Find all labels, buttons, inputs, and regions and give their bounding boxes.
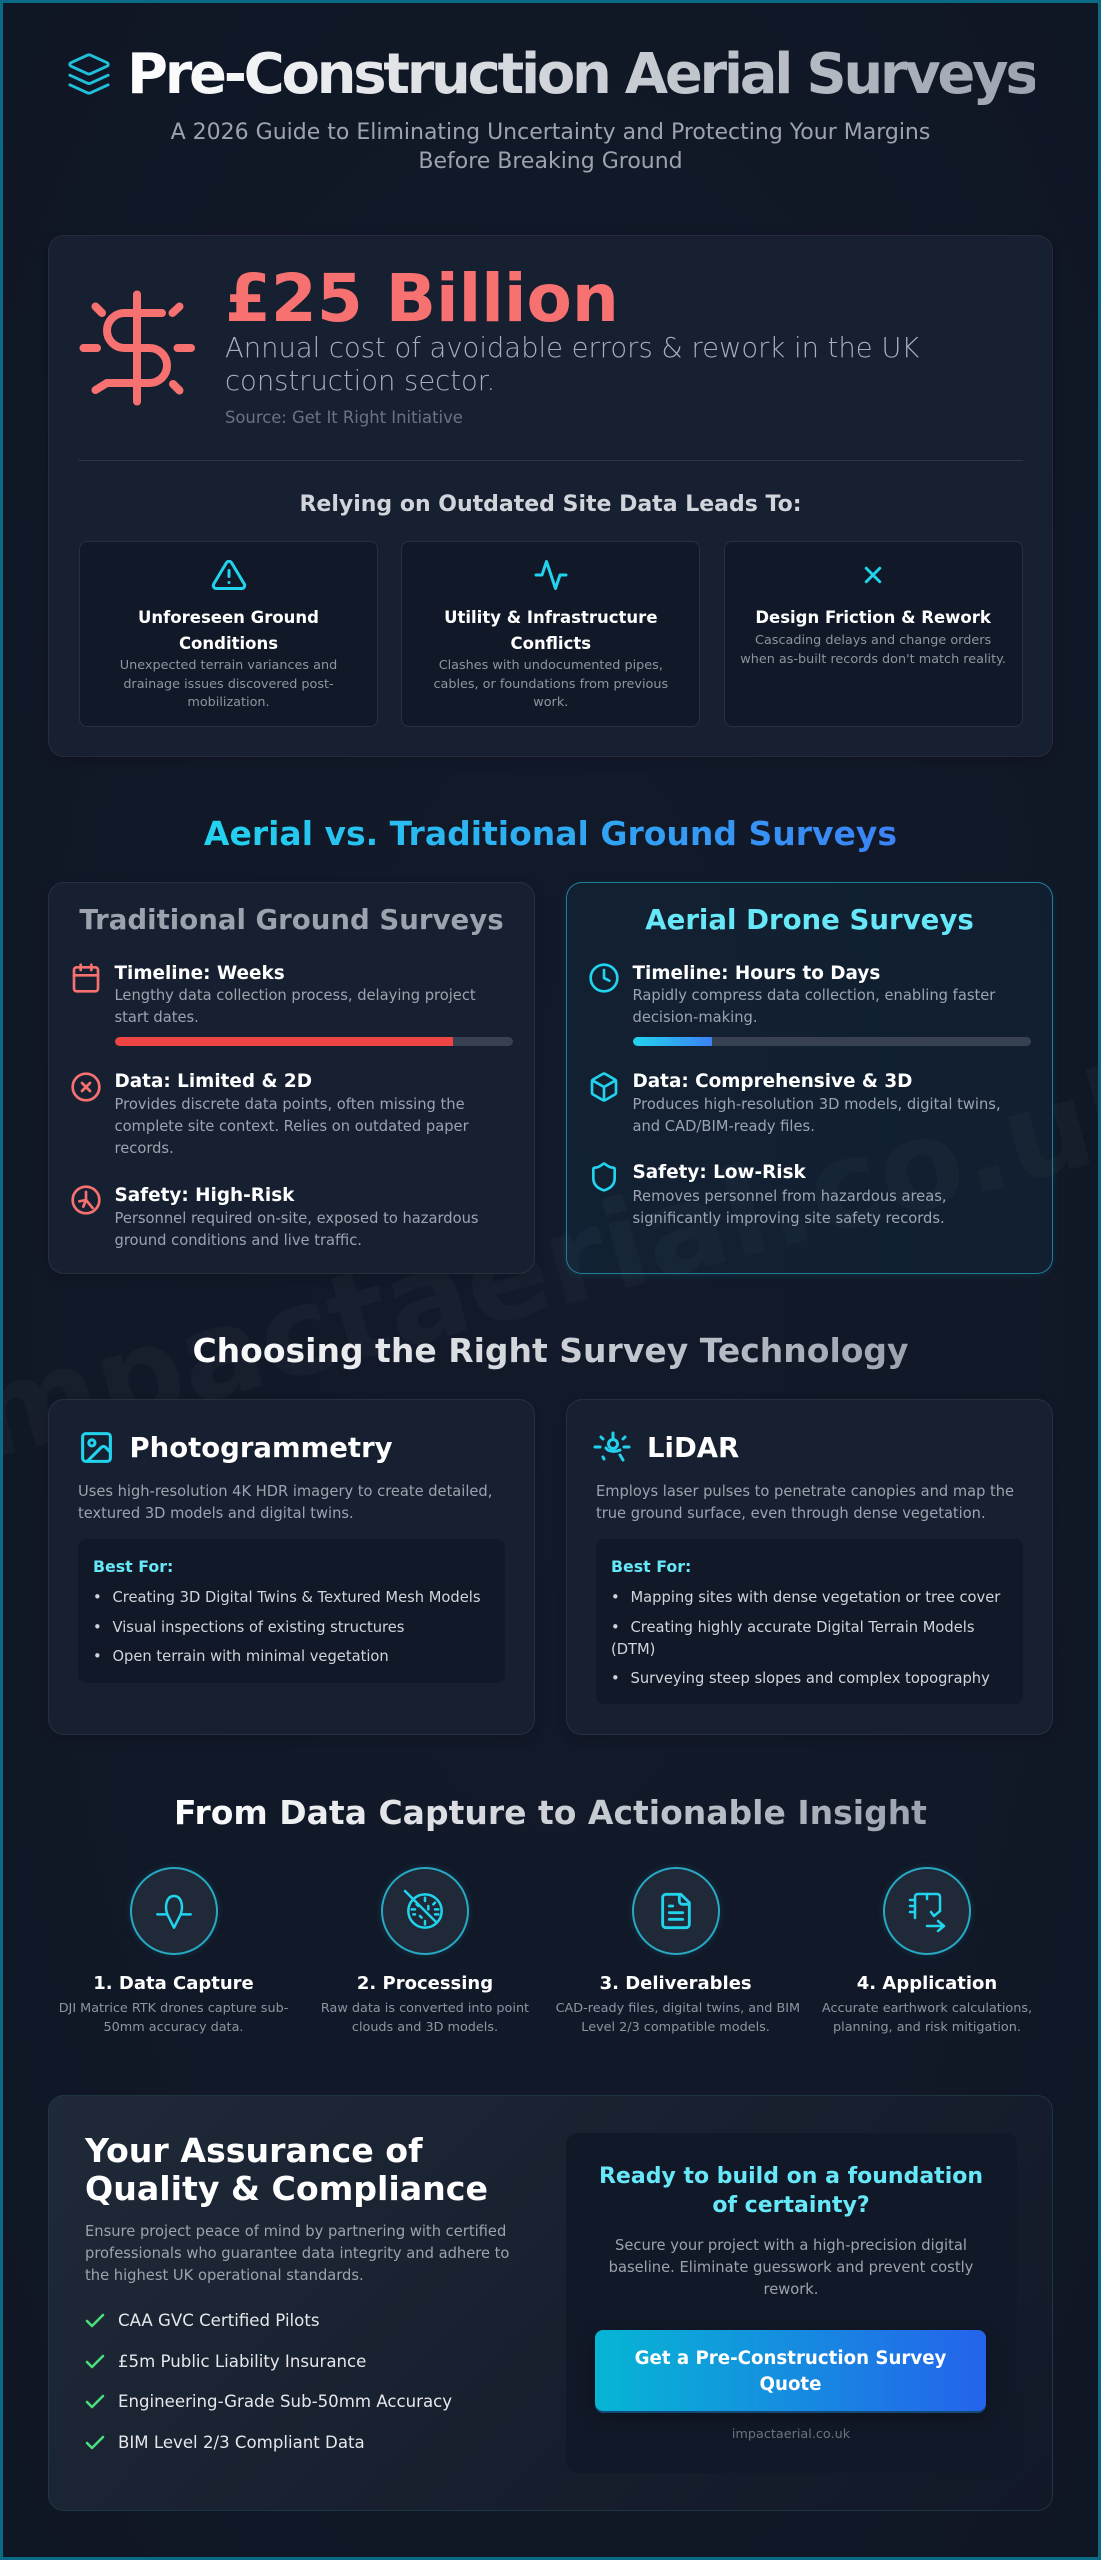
safety title: Safety: Low-Risk [632,1162,806,1182]
step title: 4. Application [857,1973,997,1994]
best for box: Open terrain with minimal vegetation [112,1648,389,1665]
icon circle: document [632,1867,720,1955]
icon: image [81,1432,112,1463]
card title: Conditions [179,634,278,652]
step text [556,2000,796,2037]
data text: Produces high-resolution 3D models, digital twins, [632,1096,1001,1112]
card text: when as-built records don't match reality. [740,652,1006,666]
step text [59,2001,288,2034]
use case 3: • [93,1648,102,1665]
safety title: Safety: High-Risk [114,1184,294,1206]
step text: Level 2/3 compatible models. [581,2020,770,2034]
assurance text: professionals who guarantee data integrity and adhere to [85,2245,509,2262]
cta button: Get a Pre-Construction Survey [635,2348,946,2368]
step: deliverables [556,1867,796,2047]
data text [632,1096,1001,1134]
best for heading: Best For: [611,1557,691,1576]
icon: dollar [80,290,195,406]
description: textured 3D models and digital twins. [78,1505,354,1522]
assurance heading [85,2132,488,2208]
use case 1 [611,1589,1000,1606]
icon: cube [590,1072,618,1102]
card title: Utility & Infrastructure [444,608,658,626]
check item 4 [81,2429,481,2457]
use case 2 [93,1618,404,1636]
step title: 3. Deliverables [600,1973,752,1994]
best for box: Creating highly accurate Digital Terrain Models [630,1618,975,1636]
icon: check [83,2431,107,2455]
panel title: Photogrammetry [130,1432,393,1464]
card text: Cascading delays and change orders [755,633,991,648]
label: CAA GVC Certified Pilots [118,2311,319,2330]
step text: planning, and risk mitigation. [833,2020,1021,2034]
heading: technology: Choosing the Right Survey Technology [192,1331,909,1370]
step text [305,2000,545,2037]
icon: shield [592,1162,616,1192]
data text: and CAD/BIM-ready files. [632,1118,815,1134]
card text [740,633,1006,666]
cta heading: Ready to build on a foundation [599,2164,983,2188]
icon: clock [589,963,619,993]
card: unforeseen ground conditions [79,541,378,727]
timeline text: start dates. [114,1009,199,1026]
subtitle [170,120,930,174]
data text: records. [114,1140,174,1156]
safety text: ground conditions and live traffic. [114,1232,362,1249]
card text: mobilization. [187,695,270,710]
card: utility conflicts [401,541,700,727]
panel title: Aerial Drone Surveys [645,903,974,936]
cta text: Secure your project with a high-precision digital [615,2237,967,2254]
cta text [566,2235,1016,2301]
subtitle: A 2026 Guide to Eliminating Uncertainty and Protecting Your Margins [171,120,930,144]
assurance text: the highest UK operational standards. [85,2267,364,2284]
timeline text [632,987,996,1026]
icon circle: pin [130,1867,218,1955]
panel: assurance [48,2095,1053,2511]
best for heading: Best For: [93,1557,173,1576]
bar: hours [632,1037,1031,1046]
timeline text [114,987,476,1026]
card title: Conflicts [510,634,591,652]
cta text: rework. [764,2281,818,2298]
check item 3 [81,2388,481,2416]
assurance text: Ensure project peace of mind by partnering with certified [85,2223,506,2240]
step: application [807,1867,1047,2047]
safety text [114,1210,479,1249]
card title: Unforeseen Ground [138,608,319,626]
panel: photogrammetry [48,1399,535,1735]
card text: Unexpected terrain variances and [120,658,337,673]
icon: check [83,2350,107,2374]
check item 1 [81,2307,481,2335]
use case 2: • [93,1618,102,1636]
use case 2: (DTM) [611,1640,655,1658]
card title: Design Friction & Rework [755,608,991,626]
panel title: LiDAR [647,1432,739,1464]
use case 2 [611,1618,975,1658]
icon: safety risk [71,1185,101,1215]
use case 1: • [611,1589,620,1606]
step: data capture [59,1866,288,2034]
source: Source: Get It Right Initiative [225,408,463,427]
panel: lidar [566,1399,1053,1735]
description: Uses high-resolution 4K HDR imagery to create detailed, [78,1483,492,1500]
timeline text: decision-making. [632,1009,758,1026]
best for box [78,1539,505,1683]
panel: traditional surveys [48,882,535,1274]
subtitle: Before Breaking Ground [418,149,683,174]
use case 1: • [93,1589,102,1606]
use case 3: • [611,1670,620,1687]
data text [114,1096,469,1156]
icon: calendar [72,963,100,993]
card text [433,658,668,710]
cost description: Annual cost of avoidable errors & rework in the UK [225,333,919,364]
cta heading: of certainty? [712,2192,870,2218]
card: design friction [724,541,1023,727]
heading: comparison: Aerial vs. Traditional Ground Surveys [204,814,897,853]
label: BIM Level 2/3 Compliant Data [118,2433,365,2452]
assurance text [85,2221,509,2287]
label: £5m Public Liability Insurance [118,2352,366,2371]
step text: DJI Matrice RTK drones capture sub- [59,2001,288,2016]
card text [120,658,337,710]
heading: process: From Data Capture to Actionable Insight [174,1792,927,1832]
cta heading [566,2162,1016,2220]
data title: Data: Comprehensive & 3D [632,1070,912,1092]
check item 2 [81,2348,481,2376]
website: impactaerial.co.uk [732,2427,850,2442]
icon: cross [864,566,882,584]
assurance heading: Quality & Compliance [85,2169,488,2208]
call to action box [566,2133,1016,2473]
description [78,1483,492,1522]
title: Pre-Construction Aerial Surveys [127,42,1035,107]
heading: outdated data: Relying on Outdated Site Data Leads To: [299,492,802,517]
card title [444,608,658,652]
timeline title: Timeline: Hours to Days [632,963,880,984]
use case 1 [93,1589,481,1606]
icon: check [83,2309,107,2333]
icon: activity [534,560,568,590]
use case 2: • [611,1618,620,1636]
card text: work. [533,695,568,710]
best for box: Visual inspections of existing structures [112,1618,404,1636]
label: Engineering-Grade Sub-50mm Accuracy [118,2392,452,2411]
safety text: Removes personnel from hazardous areas, [632,1188,947,1204]
data text: Provides discrete data points, often missing the [114,1096,465,1112]
cta button: Quote [760,2374,821,2394]
card title [138,608,319,652]
safety text [632,1188,947,1226]
best for box: Mapping sites with dense vegetation or tree cover [630,1589,1000,1606]
panel: cost of errors [48,235,1053,757]
step text [807,2000,1047,2037]
data text: complete site context. Relies on outdated paper [114,1118,469,1134]
best for box: Creating 3D Digital Twins & Textured Mesh Models [112,1589,481,1606]
timeline text: Rapidly compress data collection, enabling faster [632,987,995,1004]
big number: £25 Billion [225,260,619,337]
icon circle: processing [381,1867,469,1955]
data title: Data: Limited & 2D [114,1070,312,1092]
panel title: Traditional Ground Surveys [79,903,504,936]
cta button [595,2330,986,2411]
bar: weeks [114,1037,513,1046]
icon circle: notebook [883,1867,971,1955]
step text: clouds and 3D models. [352,2020,498,2034]
description [596,1483,1014,1522]
timeline title: Timeline: Weeks [114,963,285,984]
step text: Raw data is converted into point [321,2001,529,2016]
panel: aerial surveys [566,882,1053,1274]
step text: Accurate earthwork calculations, [822,2001,1032,2016]
best for box: Surveying steep slopes and complex topography [630,1670,990,1687]
icon: warning triangle [212,560,246,590]
safety text: Personnel required on-site, exposed to hazardous [114,1210,479,1227]
card text: cables, or foundations from previous [433,676,668,692]
best for box [596,1539,1023,1704]
icon: layers [68,53,110,95]
step text: 50mm accuracy data. [104,2020,243,2034]
cost description: construction sector. [225,366,495,397]
step text: CAD-ready files, digital twins, and BIM [556,2001,800,2016]
card text: Clashes with undocumented pipes, [439,658,663,673]
icon: lidar pulse [594,1432,630,1462]
cta text: baseline. Eliminate guesswork and prevent costly [609,2259,973,2276]
icon: check [83,2390,107,2414]
timeline text: Lengthy data collection process, delaying project [114,987,476,1004]
assurance heading: Your Assurance of [85,2131,423,2170]
use case 3 [93,1648,389,1665]
use case 3 [611,1670,990,1687]
safety text: significantly improving site safety records. [632,1210,945,1226]
description: true ground surface, even through dense vegetation. [596,1505,986,1522]
step: processing [321,1866,529,2034]
cost description [225,333,919,397]
step title: 2. Processing [357,1973,493,1994]
card text: drainage issues discovered post- [123,676,334,692]
icon: x circle [71,1072,101,1102]
description: Employs laser pulses to penetrate canopies and map the [596,1483,1014,1500]
step title: 1. Data Capture [93,1973,254,1994]
